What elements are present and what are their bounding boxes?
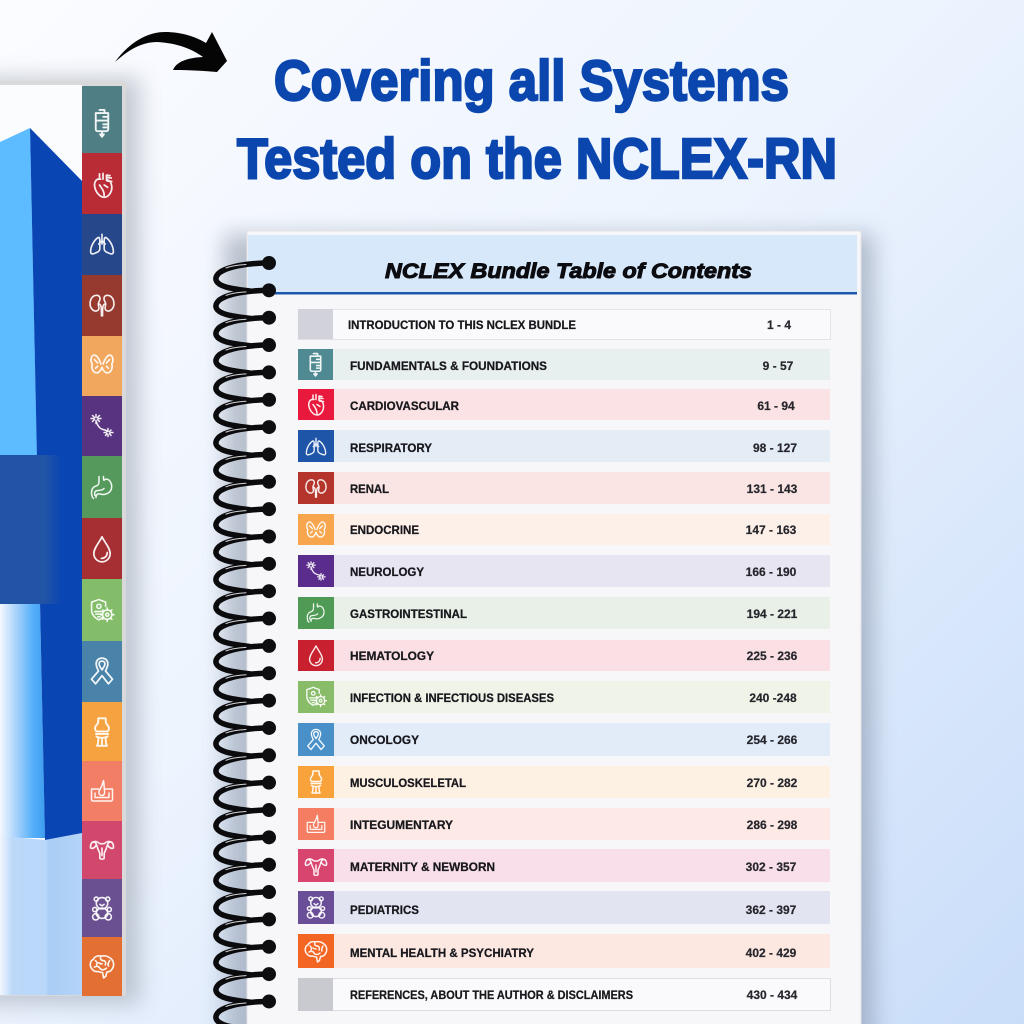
spiral binding	[216, 256, 276, 1024]
row: neurology	[298, 555, 830, 587]
row: endocrine: ENDOCRINE	[350, 523, 419, 537]
cover art: light blue face	[0, 128, 37, 456]
row: fundamentals	[298, 349, 830, 380]
tab: oncology	[82, 641, 122, 703]
row: maternity	[298, 849, 830, 882]
row: musculoskeletal: MUSCULOSKELETAL	[350, 776, 466, 790]
row: neurology: 166 - 190	[746, 565, 797, 579]
cover art: dark blue face	[30, 128, 82, 840]
row: hematology: 225 - 236	[747, 649, 798, 663]
row: oncology: ONCOLOGY	[350, 733, 419, 747]
row: pediatrics	[298, 891, 830, 924]
tab: integumentary	[82, 761, 122, 822]
row: introduction: INTRODUCTION TO THIS NCLEX BUNDLE	[348, 318, 576, 332]
row: pediatrics: PEDIATRICS	[350, 903, 419, 917]
row: pediatrics: 362 - 397	[746, 903, 797, 917]
row: musculoskeletal	[298, 766, 830, 798]
row: respiratory	[298, 430, 830, 462]
tab: renal	[82, 275, 122, 336]
header band	[248, 235, 857, 293]
row: musculoskeletal: 270 - 282	[747, 776, 798, 790]
row: infection: INFECTION & INFECTIOUS DISEASES	[350, 691, 554, 705]
tab: mental health	[82, 937, 122, 996]
tab: musculoskeletal	[82, 702, 122, 762]
row: renal: 131 - 143	[747, 482, 798, 496]
row: cardiovascular: 61 - 94	[757, 399, 795, 413]
title	[237, 49, 837, 191]
page edge	[0, 81, 126, 996]
row: integumentary: 286 - 298	[747, 818, 798, 832]
tab: neurology	[82, 396, 122, 457]
row: cardiovascular: CARDIOVASCULAR	[350, 399, 459, 413]
tab: pediatrics	[82, 879, 122, 938]
tab: cardiovascular	[82, 153, 122, 215]
row: maternity: 302 - 357	[746, 860, 797, 874]
row: hematology: HEMATOLOGY	[350, 649, 434, 663]
row: mental health: MENTAL HEALTH & PSYCHIATRY	[350, 946, 534, 960]
panel: left book cover	[0, 81, 126, 996]
row: oncology: 254 - 266	[747, 733, 798, 747]
tab: respiratory	[82, 214, 122, 276]
row: references	[298, 978, 830, 1011]
row: introduction: 1 - 4	[767, 318, 791, 332]
row: fundamentals: FUNDAMENTALS & FOUNDATIONS	[350, 359, 547, 373]
page sheet	[247, 231, 861, 1024]
tab: gastrointestinal	[82, 456, 122, 518]
row: infection	[298, 681, 830, 713]
row: hematology	[298, 640, 830, 671]
row: introduction	[298, 309, 830, 340]
row: references: REFERENCES, ABOUT THE AUTHOR & DISCLAIMERS	[350, 988, 633, 1002]
left book shadow	[0, 78, 140, 1004]
row: references: 430 - 434	[747, 988, 798, 1002]
row: neurology: NEUROLOGY	[350, 565, 424, 579]
contents rows	[298, 309, 830, 1011]
tab: infection	[82, 579, 122, 641]
tab: hematology	[82, 518, 122, 580]
tab: endocrine	[82, 336, 122, 397]
tab: maternity	[82, 821, 122, 880]
row: fundamentals: 9 - 57	[763, 359, 794, 373]
row: oncology	[298, 723, 830, 756]
title line 1: Covering all Systems	[274, 49, 789, 113]
header rule	[275, 292, 857, 294]
cover art: reflective floor	[0, 833, 82, 995]
row: renal: RENAL	[350, 482, 389, 496]
tab: fundamentals	[82, 86, 122, 154]
row: integumentary	[298, 808, 830, 840]
row: endocrine: 147 - 163	[746, 523, 797, 537]
row: respiratory: 98 - 127	[753, 441, 797, 455]
contents page shadow	[224, 234, 874, 1024]
row: infection: 240 -248	[749, 691, 797, 705]
row: respiratory: RESPIRATORY	[350, 441, 432, 455]
row: gastrointestinal: 194 - 221	[747, 607, 798, 621]
row: integumentary: INTEGUMENTARY	[350, 818, 453, 832]
row: mental health	[298, 934, 830, 968]
row: renal	[298, 472, 830, 504]
cover art: lower blue face	[0, 603, 45, 838]
row: endocrine	[298, 514, 830, 545]
panel: table of contents page	[247, 231, 861, 1024]
cover art: dark band	[0, 455, 62, 604]
arrow	[115, 32, 227, 72]
row: cardiovascular	[298, 389, 830, 420]
row: maternity: MATERNITY & NEWBORN	[350, 860, 495, 874]
title line 2: Tested on the NCLEX-RN	[237, 127, 837, 191]
cover white	[0, 85, 82, 995]
row: mental health: 402 - 429	[746, 946, 797, 960]
row: gastrointestinal	[298, 597, 830, 629]
side tabs	[82, 86, 122, 996]
page heading: NCLEX Bundle Table of Contents	[385, 260, 752, 283]
row: gastrointestinal: GASTROINTESTINAL	[350, 607, 467, 621]
